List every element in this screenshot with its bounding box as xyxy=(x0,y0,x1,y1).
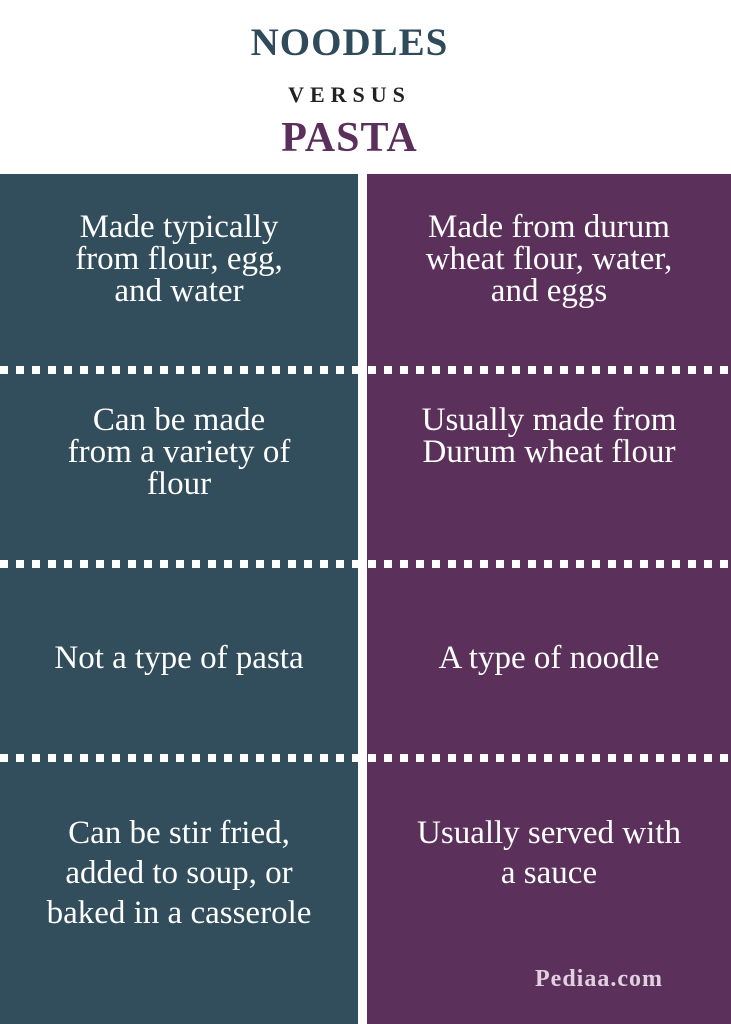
text: noodles row 3: Not a type of pasta xyxy=(54,640,304,676)
text: pasta row 4: Usually served with xyxy=(417,815,681,851)
text: pasta row 4 xyxy=(417,815,681,891)
text: noodles row 4 xyxy=(46,815,311,931)
text: noodles row 4: added to soup, or xyxy=(65,855,293,891)
text: noodles row 4: baked in a casserole xyxy=(47,895,311,931)
text: noodles row 4: Can be stir fried, xyxy=(68,815,290,851)
logo: pediaa: Pediaa.com xyxy=(535,966,663,992)
text: noodles row 2: flour xyxy=(147,466,211,502)
title: noodles: NOODLES xyxy=(251,21,448,64)
text: noodles row 1: and water xyxy=(114,273,244,309)
text: noodles row 1: from flour, egg, xyxy=(75,241,283,277)
text: pasta row 3: A type of noodle xyxy=(439,640,659,676)
text: pasta row 2: Usually made from xyxy=(422,402,676,438)
text: pasta row 1 xyxy=(426,209,672,309)
text: pasta row 1: wheat flour, water, xyxy=(426,241,672,277)
text: pasta row 4: a sauce xyxy=(501,855,597,891)
title: versus: VERSUS xyxy=(288,82,411,107)
text: noodles row 2: Can be made xyxy=(93,402,265,438)
text: noodles row 2: from a variety of xyxy=(68,434,290,470)
title: pasta: PASTA xyxy=(281,115,418,161)
text: noodles row 1 xyxy=(75,209,283,309)
text: noodles row 1: Made typically xyxy=(80,209,278,245)
panel: noodles xyxy=(0,174,358,1024)
text: noodles row 2 xyxy=(68,402,290,502)
panel: pasta xyxy=(367,174,731,1024)
text: pasta row 2: Durum wheat flour xyxy=(423,434,675,470)
text: pasta row 2 xyxy=(422,402,676,470)
text: pasta row 1: and eggs xyxy=(491,273,607,309)
text: pasta row 1: Made from durum xyxy=(428,209,670,245)
